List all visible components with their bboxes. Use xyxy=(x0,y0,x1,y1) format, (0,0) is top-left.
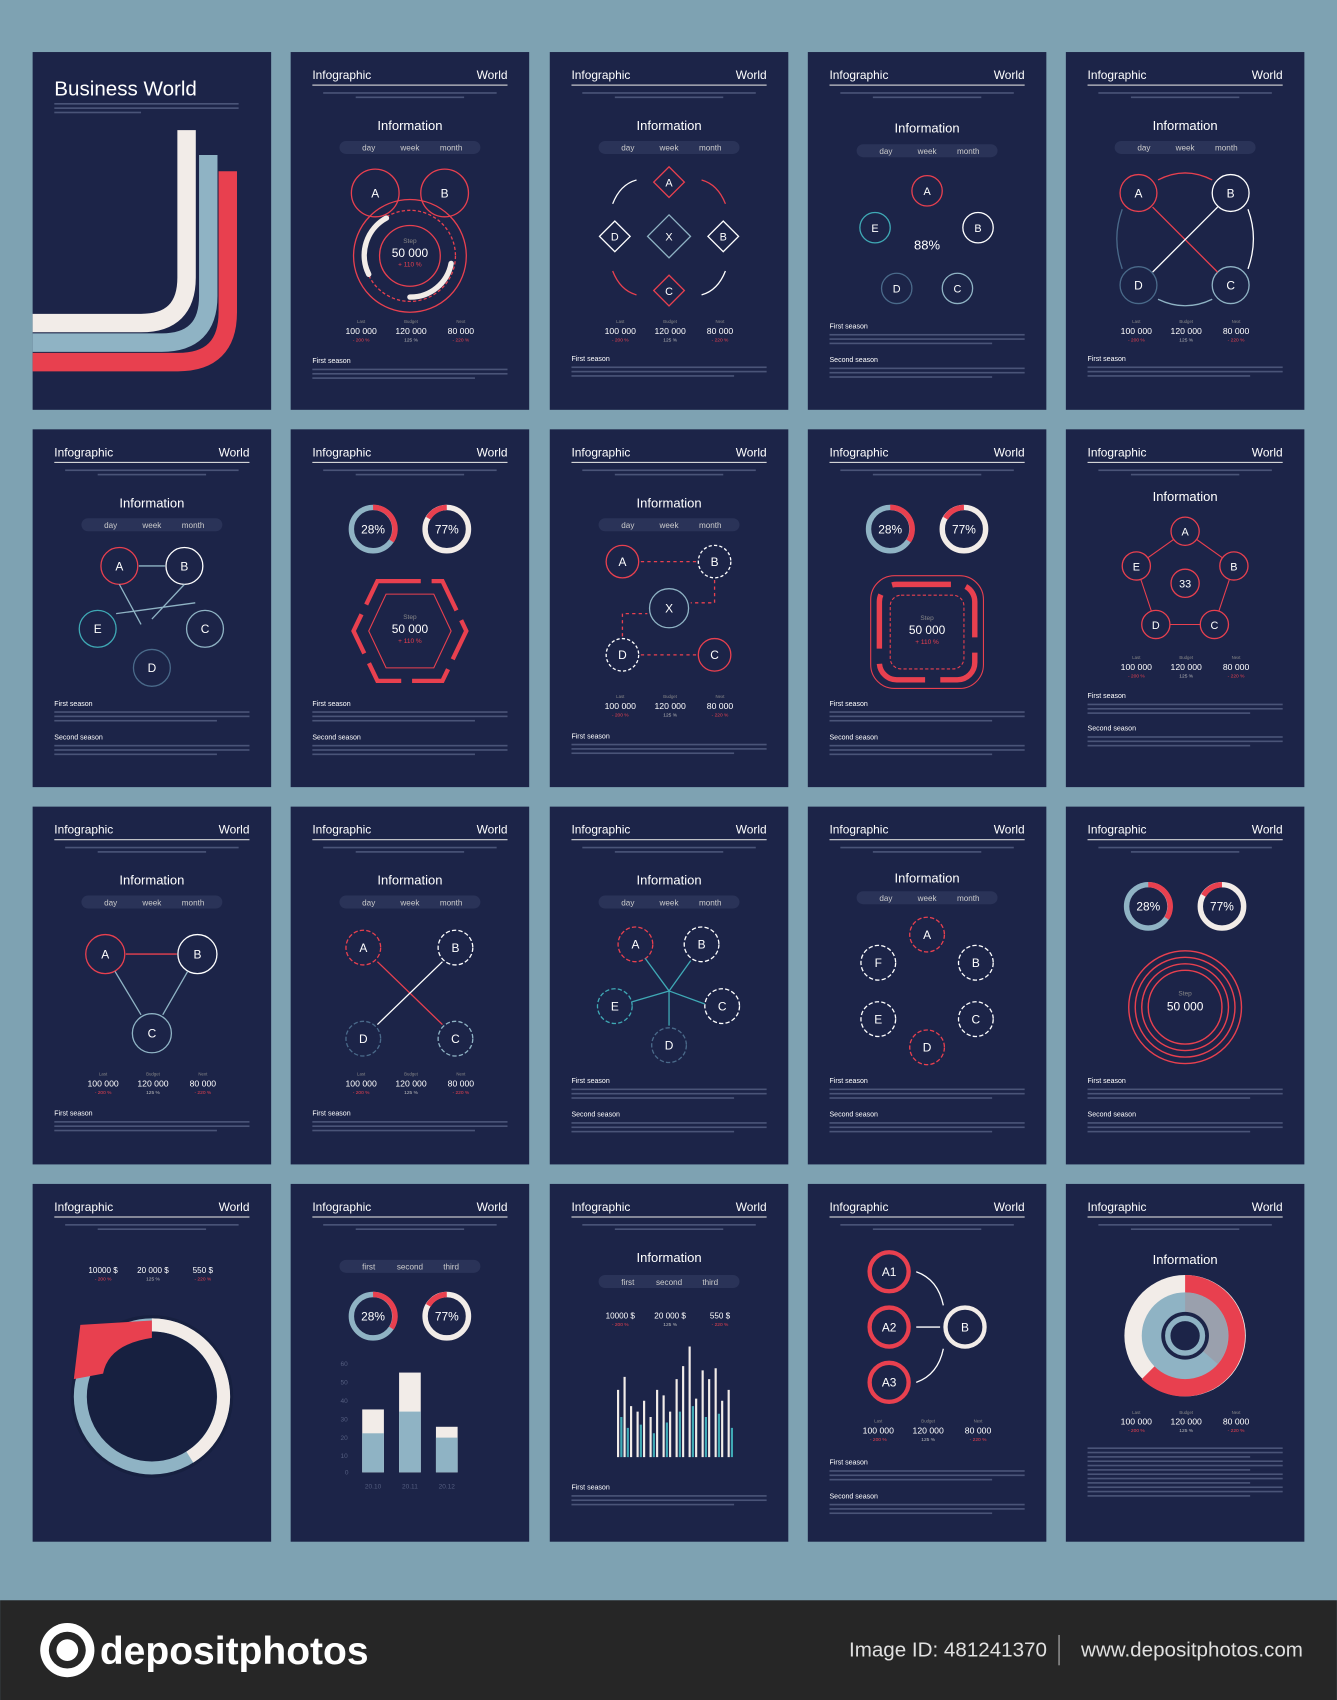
panel: line bar chart: first xyxy=(621,1278,635,1287)
panel: bar chart xyxy=(291,1184,529,1542)
panel: pentagon 33: First season xyxy=(1088,693,1126,700)
panel: bar chart: 28% xyxy=(361,1310,385,1324)
panel: hexagon 28% 77%: 28% xyxy=(361,522,385,536)
panel: bar chart: second xyxy=(397,1263,423,1272)
J shape stripes xyxy=(33,130,228,362)
panel: hexagon 28% 77%: Step xyxy=(403,614,417,621)
panel: X network dashed: B xyxy=(711,555,719,569)
panel: X cross ABCD: B xyxy=(451,941,459,955)
panel: ABCD square cycle xyxy=(1066,52,1304,410)
panel: line bar chart: third xyxy=(702,1278,718,1287)
panel: pentagon 33: B xyxy=(1230,561,1238,573)
panel: diamonds: C xyxy=(665,286,673,298)
panel: concentric rings: 77% xyxy=(1210,900,1234,914)
panel: ABCDE network: A xyxy=(115,559,123,573)
panel: 88% cycle: Information xyxy=(895,120,960,135)
panel: step circle A B: + 110 % xyxy=(398,262,422,269)
panel: line bar chart: 125 % xyxy=(663,1322,678,1328)
panel: hexagon ring ABCDEF: F xyxy=(875,956,882,970)
panel: concentric rings: First season xyxy=(1088,1078,1126,1085)
panel: X cross ABCD: A xyxy=(359,941,367,955)
panel: pentagon 33: A xyxy=(1181,527,1189,539)
panel: rounded square step: 50 000 xyxy=(909,623,946,637)
panel: hexagon 28% 77%: 50 000 xyxy=(392,622,429,636)
panel: ABCD square cycle: C xyxy=(1226,278,1235,292)
panel: bar chart: 30 xyxy=(341,1416,348,1423)
image id: Image ID: 481241370 xyxy=(849,1639,1047,1662)
panel: hexagon 28% 77%: First season xyxy=(312,701,351,708)
panel: hexagon ring ABCDEF: Information xyxy=(895,871,960,886)
panel: X cross ABCD: D xyxy=(359,1032,368,1046)
panel: diamonds: First season xyxy=(571,356,610,363)
panel: triangle ABC: Information xyxy=(119,873,184,888)
panel: ABCD square cycle: A xyxy=(1135,186,1143,200)
panel: ABCDE star: D xyxy=(665,1038,674,1052)
panel: big donut: 20 000 $ xyxy=(137,1266,169,1275)
panel: ABCDE network: Second season xyxy=(54,734,103,741)
panel: rounded square step xyxy=(808,429,1046,787)
panel: concentric rings: 28% xyxy=(1136,900,1161,914)
panel: step circle A B: Step xyxy=(403,238,417,245)
panel: bar chart: 20.11 xyxy=(402,1484,418,1491)
panel: 88% cycle: 88% xyxy=(914,237,941,252)
panel: line bar chart: 20 000 $ xyxy=(654,1311,686,1320)
panel: A1 A2 A3 to B: A2 xyxy=(882,1320,897,1334)
panel: bar chart: third xyxy=(443,1263,459,1272)
panel: hexagon ring ABCDEF xyxy=(808,807,1046,1164)
panel: rounded square step: Step xyxy=(920,615,934,622)
panel: hexagon 28% 77% xyxy=(291,429,529,787)
panel: rounded square step: Second season xyxy=(830,734,878,741)
panel: step circle A B: 50 000 xyxy=(392,246,429,260)
panel: hexagon 28% 77%: Second season xyxy=(312,734,361,741)
panel: bar chart: 77% xyxy=(435,1310,459,1324)
panel: 88% cycle: A xyxy=(923,186,931,198)
panel: big donut: 550 $ xyxy=(193,1266,213,1275)
url: www.depositphotos.com xyxy=(1080,1639,1303,1662)
panel: ABCDE network: Information xyxy=(119,495,184,510)
panel: triangle ABC: First season xyxy=(54,1111,93,1118)
panel: 88% cycle: Second season xyxy=(830,357,878,364)
panel: diamonds: A xyxy=(665,177,673,189)
panel: 88% cycle: First season xyxy=(830,324,868,331)
panel: diamonds: B xyxy=(720,232,727,244)
panel: rounded square step: 77% xyxy=(952,522,976,536)
title: Business World xyxy=(54,77,197,100)
panel: diamonds xyxy=(550,52,788,410)
panel: big donut: - 200 % xyxy=(95,1276,112,1282)
panel: rounded square step: First season xyxy=(830,701,868,708)
panel: pentagon 33 xyxy=(1066,429,1304,787)
panel: hexagon ring ABCDEF: Second season xyxy=(830,1112,878,1119)
panel: X cross ABCD: First season xyxy=(312,1111,351,1118)
panel: cover Business World xyxy=(33,52,271,410)
panel: rounded square step: 28% xyxy=(878,522,903,536)
panel: X cross ABCD xyxy=(291,807,529,1164)
panel: X network dashed: A xyxy=(618,555,626,569)
panel: A1 A2 A3 to B xyxy=(808,1184,1046,1542)
panel: diamonds: Information xyxy=(637,118,702,133)
panel: pentagon 33: Second season xyxy=(1088,726,1136,733)
panel: concentric rings: Second season xyxy=(1088,1112,1136,1119)
panel: ABCDE star: Information xyxy=(637,873,702,888)
panel: ABCDE network: D xyxy=(148,661,157,675)
panel: X cross ABCD: C xyxy=(451,1032,460,1046)
panel: 88% cycle: E xyxy=(871,223,879,235)
panel: hexagon ring ABCDEF: C xyxy=(972,1012,981,1026)
panel: ABCD square cycle: D xyxy=(1134,278,1143,292)
panel: line bar chart: First season xyxy=(571,1485,610,1492)
panel: 88% cycle: C xyxy=(954,284,962,296)
panel: bar chart: 10 xyxy=(341,1453,348,1460)
panel: rounded square step: + 110 % xyxy=(915,639,939,646)
panel: step circle A B xyxy=(291,52,529,410)
panel: concentric rings: 50 000 xyxy=(1167,999,1204,1013)
panel: step circle A B: First season xyxy=(312,358,351,365)
panel: bar chart: 40 xyxy=(341,1398,348,1405)
panel: line bar chart: - 220 % xyxy=(712,1322,729,1328)
panel: hexagon 28% 77%: + 110 % xyxy=(398,638,422,645)
panel: A1 A2 A3 to B: A1 xyxy=(882,1265,897,1279)
panel: A1 A2 A3 to B: Second season xyxy=(830,1493,878,1500)
panel: pentagon 33: Information xyxy=(1153,489,1218,504)
panel: bar chart: 20.10 xyxy=(365,1484,382,1491)
panel: ABCD square cycle: First season xyxy=(1088,356,1126,363)
panel: 88% cycle: D xyxy=(893,284,901,296)
panel: A1 A2 A3 to B: First season xyxy=(830,1460,868,1467)
panel: concentric rings: Step xyxy=(1178,990,1192,997)
panel: hexagon ring ABCDEF: A xyxy=(923,928,931,942)
panel: line bar chart xyxy=(550,1184,788,1542)
panel: hexagon ring ABCDEF: E xyxy=(874,1012,882,1026)
panel: triangle ABC: C xyxy=(148,1027,157,1041)
panel: layered donut: Information xyxy=(1153,1252,1218,1267)
panel: line bar chart: second xyxy=(656,1278,682,1287)
panel: ABCDE star: B xyxy=(698,938,706,952)
panel: A1 A2 A3 to B: A3 xyxy=(882,1376,897,1390)
panel: step circle A B: A xyxy=(371,186,379,200)
footer bar xyxy=(0,1600,1337,1700)
panel: ABCDE network: B xyxy=(180,559,188,573)
panel: pentagon 33: E xyxy=(1133,561,1140,573)
panel: X network dashed xyxy=(550,429,788,787)
panel: triangle ABC xyxy=(33,807,271,1164)
panel: X network dashed: Information xyxy=(637,495,702,510)
panel: hexagon ring ABCDEF: B xyxy=(972,956,980,970)
panel: 88% cycle: B xyxy=(974,223,982,235)
panel: ABCDE star xyxy=(550,807,788,1164)
panel: bar chart: 50 xyxy=(341,1380,348,1387)
panel: ABCD square cycle: B xyxy=(1227,186,1235,200)
panel: ABCDE network xyxy=(33,429,271,787)
panel: layered donut xyxy=(1066,1184,1304,1542)
panel: pentagon 33: 33 xyxy=(1179,579,1191,591)
panel: diamonds: X xyxy=(665,232,673,244)
panel: line bar chart: 550 $ xyxy=(710,1311,731,1320)
panel: concentric rings xyxy=(1066,807,1304,1164)
panel: pentagon 33: D xyxy=(1152,620,1160,632)
panel: triangle ABC: A xyxy=(101,947,109,961)
panel: line bar chart: - 200 % xyxy=(612,1322,629,1328)
panel: pentagon 33: C xyxy=(1210,620,1218,632)
panel: diamonds: D xyxy=(611,232,619,244)
panel: ABCDE network: First season xyxy=(54,701,93,708)
panel: A1 A2 A3 to B: B xyxy=(961,1320,969,1334)
panel: step circle A B: B xyxy=(441,186,449,200)
panel: ABCDE star: C xyxy=(718,999,727,1013)
panel: X network dashed: First season xyxy=(571,733,610,740)
panel: big donut: - 220 % xyxy=(194,1276,212,1282)
panel: hexagon 28% 77%: 77% xyxy=(435,522,459,536)
panel: big donut: 10000 $ xyxy=(88,1266,118,1275)
panel: X network dashed: D xyxy=(618,648,627,662)
panel: hexagon ring ABCDEF: D xyxy=(923,1041,932,1055)
panel: 88% cycle xyxy=(808,52,1046,410)
panel: ABCDE star: First season xyxy=(571,1078,610,1085)
panel: step circle A B: Information xyxy=(377,118,442,133)
panel: big donut xyxy=(33,1184,271,1542)
panel: ABCDE star: Second season xyxy=(571,1112,620,1119)
panel: ABCD square cycle: Information xyxy=(1153,118,1218,133)
panel: bar chart: 0 xyxy=(345,1469,349,1476)
panel: line bar chart: Information xyxy=(637,1250,702,1265)
icon: camera logo xyxy=(40,1623,94,1677)
panel: X network dashed: X xyxy=(665,602,673,616)
panel: bar chart: 20.12 xyxy=(439,1484,455,1491)
panel: X cross ABCD: Information xyxy=(377,873,442,888)
panel: big donut: 125 % xyxy=(146,1276,161,1282)
panel: X network dashed: C xyxy=(710,648,719,662)
logo text: depositphotos xyxy=(100,1630,369,1673)
panel: triangle ABC: B xyxy=(193,947,201,961)
panel: ABCDE star: E xyxy=(611,999,619,1013)
panel: hexagon ring ABCDEF: First season xyxy=(830,1078,868,1085)
panel: bar chart: 60 xyxy=(341,1361,348,1368)
panel: bar chart: 20 xyxy=(341,1435,348,1442)
panel: bar chart: first xyxy=(362,1263,376,1272)
panel: ABCDE network: C xyxy=(201,622,210,636)
panel: ABCDE star: A xyxy=(631,938,639,952)
panel: ABCDE network: E xyxy=(94,622,102,636)
panel: line bar chart: 10000 $ xyxy=(606,1311,635,1320)
